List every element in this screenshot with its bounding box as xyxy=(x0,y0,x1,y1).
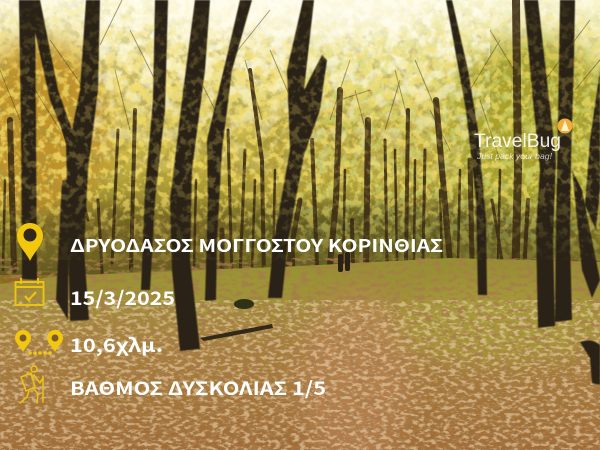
walkers on the path xyxy=(338,252,350,272)
text: location: ΔΡΥΟΔΑΣΟΣ ΜΟΓΓΟΣΤΟΥ ΚΟΡΙΝΘΙΑΣ xyxy=(70,233,443,258)
icon: location pin xyxy=(17,223,43,261)
canopy branches xyxy=(0,0,600,160)
logo: TravelBug xyxy=(474,118,572,161)
logo: TravelBug: TravelBug xyxy=(474,130,561,152)
text: date: 15/3/2025 xyxy=(70,284,175,311)
fallen branch and moss stump xyxy=(200,299,273,341)
foliage speckle over trunks xyxy=(0,0,600,260)
logo: TravelBug: Just pack your bag! xyxy=(476,151,553,161)
sun glare xyxy=(150,0,430,38)
icon: route between two pins xyxy=(15,330,63,355)
icon: calendar xyxy=(16,278,44,305)
icon: hiker xyxy=(20,366,43,403)
text: difficulty: ΒΑΘΜΟΣ ΔΥΣΚΟΛΙΑΣ 1/5 xyxy=(70,375,326,401)
forest floor xyxy=(0,258,600,450)
text: distance: 10,6χλμ. xyxy=(70,331,163,358)
distant thin trunks xyxy=(3,0,528,296)
canopy foliage behind trunks xyxy=(0,0,600,260)
forest background xyxy=(0,0,600,275)
bright sky gaps xyxy=(90,0,490,190)
